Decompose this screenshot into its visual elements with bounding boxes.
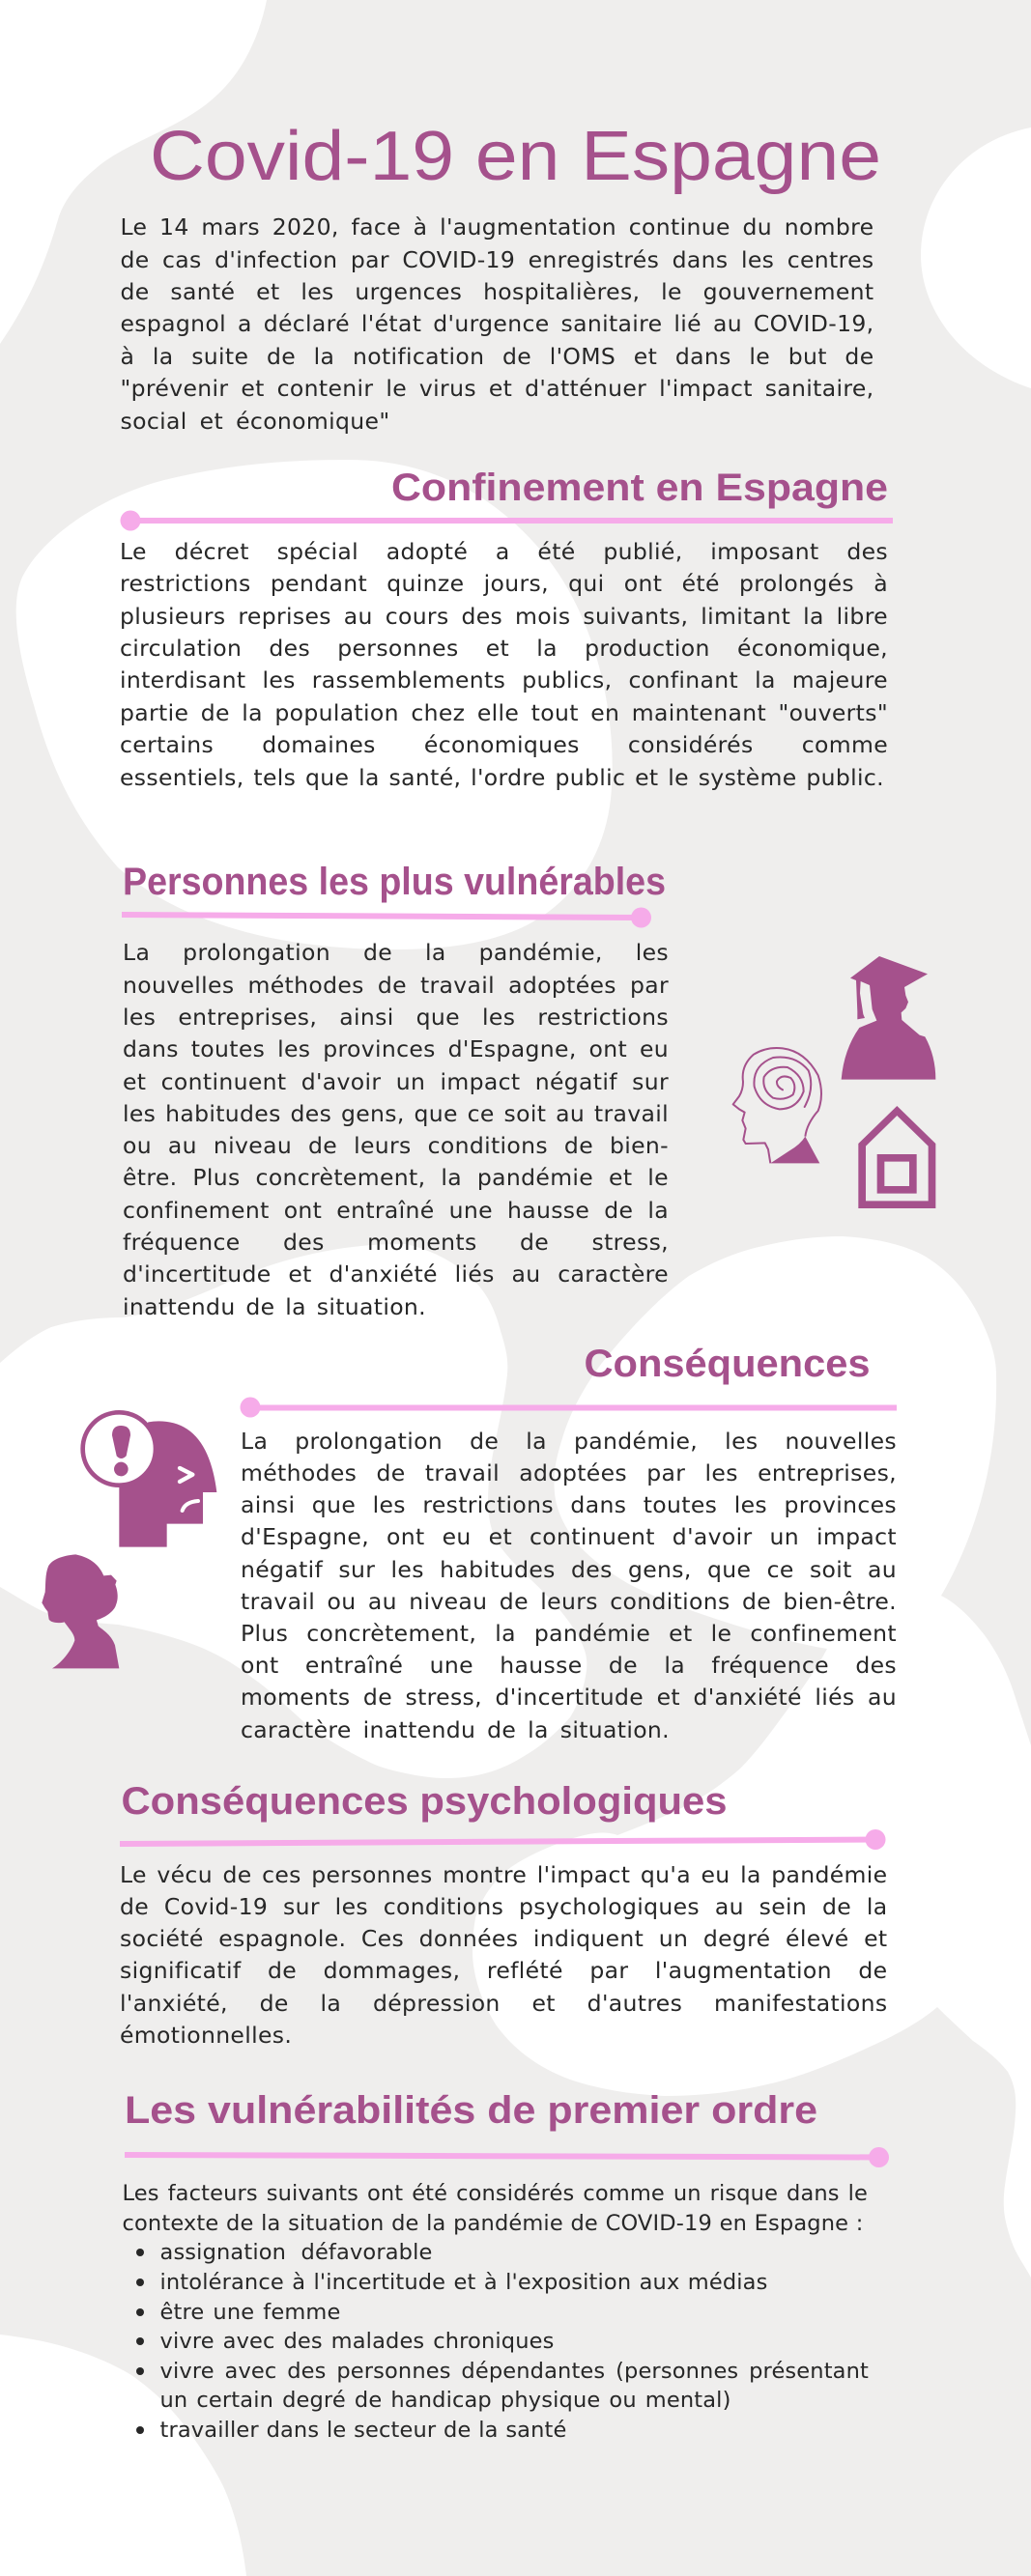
text block: conséquences: négatif sur les habitudes des gens, que ce soit au xyxy=(241,1556,897,1583)
text block: conséquences psychologiques: significatif de dommages, reflété par l'augmentation de xyxy=(120,1957,887,1984)
text block: introduction xyxy=(120,213,873,435)
heading: Conséquences psychologiques: Conséquences psychologiques xyxy=(122,1780,727,1823)
heading: Personnes les plus vulnérables: Personnes les plus vulnérables xyxy=(123,861,666,903)
text block: introduction: de cas d'infection par COVID-19 enregistrés dans les centres xyxy=(120,246,873,273)
text block: conséquences: La prolongation de la pandémie, les nouvelles xyxy=(241,1428,897,1455)
text block: personnes vulnérables: ou au niveau de leurs conditions de bien- xyxy=(123,1132,669,1159)
text block: conséquences: Plus concrètement, la pandémie et le confinement xyxy=(241,1620,897,1647)
text block: confinement: plusieurs reprises au cours des mois suivants, limitant la libre xyxy=(120,603,888,630)
text block: facteurs de risque: contexte de la situation de la pandémie de COVID-19 en Espagne : xyxy=(122,2211,864,2236)
text block: introduction: de santé et les urgences hospitalières, le gouvernement xyxy=(120,278,873,305)
icon: house xyxy=(858,1106,935,1208)
heading: Conséquences: Conséquences xyxy=(584,1343,870,1385)
heading: Confinement en Espagne: Confinement en Espagne xyxy=(391,467,888,509)
text block: conséquences: méthodes de travail adoptées par les entreprises, xyxy=(241,1459,897,1486)
text block: personnes vulnérables: être. Plus concrètement, la pandémie et le xyxy=(123,1164,669,1191)
text block: conséquences psychologiques: société espagnole. Ces données indiquent un degré élevé et xyxy=(120,1925,887,1952)
text block: introduction: social et économique" xyxy=(120,408,390,435)
text block: personnes vulnérables: inattendu de la situation. xyxy=(123,1293,426,1320)
title: Covid-19 en Espagne xyxy=(150,118,881,195)
list of risk factors: intolérance à l'incertitude et à l'exposition aux médias xyxy=(160,2270,767,2295)
text block: confinement xyxy=(120,538,888,791)
text block: personnes vulnérables xyxy=(123,939,669,1320)
heading: Les vulnérabilités de premier ordre: Les vulnérabilités de premier ordre xyxy=(125,2089,817,2132)
list of risk factors xyxy=(136,2240,869,2443)
text block: conséquences psychologiques: Le vécu de ces personnes montre l'impact qu'a eu la pandémie xyxy=(120,1861,887,1888)
text block: conséquences: caractère inattendu de la situation. xyxy=(241,1716,670,1743)
text block: conséquences psychologiques: émotionnelles. xyxy=(120,2022,292,2049)
text block: introduction: à la suite de la notification de l'OMS et dans le but de xyxy=(120,343,873,370)
list of risk factors: assignation défavorable xyxy=(160,2240,433,2265)
text block: confinement: partie de la population chez elle tout en maintenant "ouverts" xyxy=(120,699,888,726)
text block: personnes vulnérables: confinement ont entraîné une hausse de la xyxy=(123,1197,669,1224)
list of risk factors: travailler dans le secteur de la santé xyxy=(160,2418,566,2443)
text block: conséquences psychologiques xyxy=(120,1861,887,2049)
icon: graduate silhouette xyxy=(842,956,935,1080)
text block: personnes vulnérables: nouvelles méthodes de travail adoptées par xyxy=(123,972,669,999)
list of risk factors: vivre avec des personnes dépendantes (personnes présentant xyxy=(160,2359,869,2384)
text block: personnes vulnérables: les entreprises, ainsi que les restrictions xyxy=(123,1004,669,1031)
text block: conséquences psychologiques: de Covid-19 sur les conditions psychologiques au sein de la xyxy=(120,1893,887,1920)
list of risk factors: vivre avec des malades chroniques xyxy=(160,2329,555,2354)
text block: conséquences: ainsi que les restrictions dans toutes les provinces xyxy=(241,1491,897,1518)
text block: confinement: Le décret spécial adopté a été publié, imposant des xyxy=(120,538,888,565)
text block: confinement: essentiels, tels que la santé, l'ordre public et le système public. xyxy=(120,764,884,791)
text block: conséquences psychologiques: l'anxiété, de la dépression et d'autres manifestations xyxy=(120,1990,887,2017)
icon: worried head with exclamation xyxy=(83,1412,216,1547)
text block: personnes vulnérables: dans toutes les provinces d'Espagne, ont eu xyxy=(123,1035,669,1062)
text block: introduction: espagnol a déclaré l'état d'urgence sanitaire lié au COVID-19, xyxy=(120,310,873,337)
text block: conséquences xyxy=(241,1428,897,1743)
list of risk factors: un certain degré de handicap physique ou mental) xyxy=(160,2388,730,2413)
text block: introduction: "prévenir et contenir le virus et d'atténuer l'impact sanitaire, xyxy=(120,375,873,402)
text block: facteurs de risque xyxy=(122,2181,869,2443)
text block: confinement: certains domaines économiques considérés comme xyxy=(120,731,888,758)
text block: personnes vulnérables: et continuent d'avoir un impact négatif sur xyxy=(123,1068,669,1095)
text block: conséquences: moments de stress, d'incertitude et d'anxiété liés au xyxy=(241,1684,897,1711)
text block: personnes vulnérables: fréquence des moments de stress, xyxy=(123,1229,669,1256)
text block: conséquences: ont entraîné une hausse de la fréquence des xyxy=(241,1652,897,1679)
list of risk factors: être une femme xyxy=(160,2300,340,2325)
text block: confinement: restrictions pendant quinze jours, qui ont été prolongés à xyxy=(120,570,888,597)
text block: conséquences: travail ou au niveau de leurs conditions de bien-être. xyxy=(241,1588,897,1615)
text block: personnes vulnérables: les habitudes des gens, que ce soit au travail xyxy=(123,1100,669,1127)
icon: woman silhouette xyxy=(42,1554,119,1668)
text block: introduction: Le 14 mars 2020, face à l'augmentation continue du nombre xyxy=(120,213,873,241)
text block: facteurs de risque: Les facteurs suivants ont été considérés comme un risque dans le xyxy=(122,2181,868,2206)
text block: confinement: interdisant les rassemblements publics, confinant la majeure xyxy=(120,666,888,694)
text block: conséquences: d'Espagne, ont eu et continuent d'avoir un impact xyxy=(241,1523,897,1550)
text block: confinement: circulation des personnes et la production économique, xyxy=(120,635,888,662)
text block: personnes vulnérables: La prolongation de la pandémie, les xyxy=(123,939,669,966)
text block: personnes vulnérables: d'incertitude et d'anxiété liés au caractère xyxy=(123,1260,669,1288)
icon: head with spiral xyxy=(733,1048,821,1163)
